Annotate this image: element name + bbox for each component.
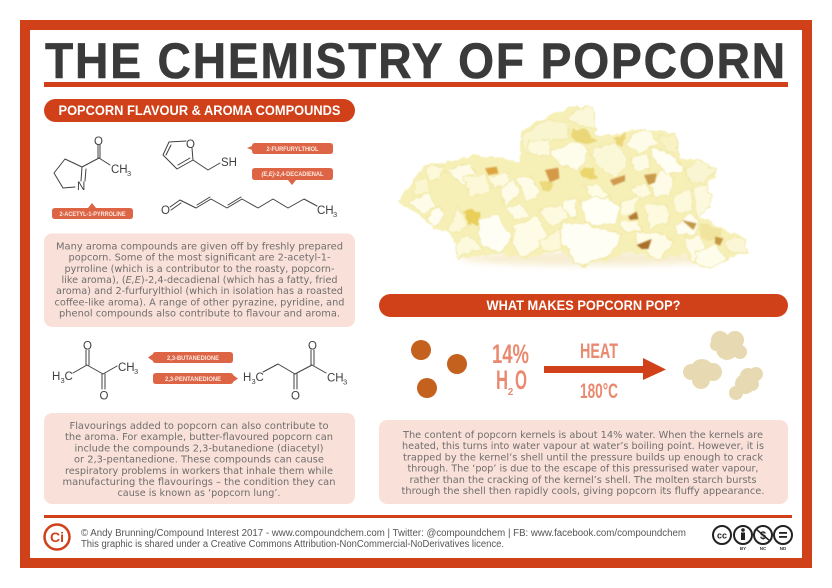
molecule: (E,E)-2,4-decadienal — [161, 197, 337, 219]
panel: flavourings text — [44, 413, 355, 504]
text: 14% H2O: O — [515, 365, 527, 395]
label: (E,E)-2,4-decadienal — [252, 168, 333, 185]
panel: aroma compounds text: pyrroline (which is a contributor to the roasty, popcorn- — [64, 264, 334, 275]
panel: aroma compounds text: coffee-like aroma). A range of other pyrazine, pyridine, and — [54, 297, 345, 308]
molecule: 2,3-pentanedione: O — [308, 340, 317, 352]
label: 2-acetyl-1-pyrroline — [52, 203, 133, 219]
molecule: 2,3-pentanedione — [243, 340, 347, 402]
molecule: 2,3-butanedione: O — [83, 340, 92, 352]
panel: aroma compounds text: aroma) and 2-furfurylthiol (which in isolation has a roasted — [56, 286, 343, 297]
icon: creative commons badges: cc — [717, 530, 727, 540]
panel: what makes popcorn pop heading — [379, 294, 788, 317]
text: 14% H2O — [492, 339, 529, 398]
panel: why popcorn pops text: heated, this turns into water vapour at water’s boiling point. However, it is — [402, 441, 764, 452]
footer credits: This graphic is shared under a Creative Commons Attribution-NonCommercial-NoDerivatives licence. — [81, 539, 504, 550]
molecule: 2,3-pentanedione: H — [243, 372, 251, 384]
label: 2,3-pentanedione — [153, 373, 238, 384]
panel: why popcorn pops text: rather than the cracking of the kernel’s shell. The molten starch bursts — [410, 475, 757, 486]
molecule: 2,3-butanedione: CH — [118, 362, 135, 374]
panel: why popcorn pops text: trapped by the kernel’s shell until the pressure builds up enough to crack — [403, 452, 764, 463]
molecule: 2,3-butanedione: H — [52, 371, 60, 383]
molecule: 2,3-butanedione: O — [100, 390, 108, 402]
icon: creative commons badges: BY — [740, 546, 746, 551]
icon: compound interest logo — [44, 524, 70, 550]
molecule: 2,3-butanedione — [52, 340, 138, 402]
molecule: 2,3-pentanedione: 3 — [252, 377, 256, 386]
panel: flavourings text: cause is known as ‘popcorn lung’. — [118, 488, 280, 499]
footer credits — [81, 528, 686, 550]
panel: aroma compounds text: like aroma), (E,E)-2,4-decadienal (which has a fatty, fried — [62, 275, 338, 286]
molecule: 2,3-butanedione: 3 — [60, 376, 65, 385]
panel: aroma compounds text — [44, 234, 355, 327]
panel: why popcorn pops text — [379, 420, 788, 504]
molecule: 2-acetyl-1-pyrroline: 3 — [127, 169, 131, 178]
molecule: 2,3-pentanedione: C — [256, 372, 264, 384]
label: 2-furfurylthiol: 2-FURFURYLTHIOL — [266, 147, 319, 153]
icon: creative commons badges: NC — [760, 546, 767, 551]
panel: flavourings text: Flavourings added to popcorn can also contribute to — [70, 421, 329, 432]
molecule: 2-furfurylthiol — [163, 139, 237, 170]
arrow — [544, 358, 666, 380]
text: 14% H2O: 14% — [492, 339, 529, 369]
label: (E,E)-2,4-decadienal: (E,E)-2,4-DECADIENAL — [262, 172, 324, 178]
molecule: (E,E)-2,4-decadienal: 3 — [333, 210, 337, 219]
molecule: 2-acetyl-1-pyrroline: N — [77, 181, 85, 193]
molecule: (E,E)-2,4-decadienal: CH — [317, 205, 334, 217]
text: 180 degrees C: 180°C — [580, 379, 618, 403]
icon: compound interest logo: Ci — [50, 529, 64, 545]
text: 14% H2O: 2 — [508, 387, 514, 398]
panel: flavourings text: the aroma. For example, butter-flavoured popcorn can — [65, 432, 333, 443]
panel: flavourings text: include the compounds 2,3-butanedione (diacetyl) — [74, 443, 324, 454]
label: 2-acetyl-1-pyrroline: 2-ACETYL-1-PYRROLINE — [60, 212, 126, 218]
label: 2,3-butanedione: 2,3-BUTANEDIONE — [167, 356, 219, 362]
molecule: 2,3-pentanedione: 3 — [343, 378, 347, 386]
molecule: 2,3-pentanedione: CH — [327, 372, 344, 384]
label: 2,3-pentanedione: 2,3-PENTANEDIONE — [165, 377, 221, 383]
panel: flavourings text: respiratory problems in workers that inhale them while — [65, 466, 333, 477]
icon: creative commons badges: ND — [780, 546, 787, 551]
image: popcorn pile — [398, 107, 747, 270]
molecule: 2-acetyl-1-pyrroline: O — [94, 136, 103, 148]
label: 2-furfurylthiol — [247, 143, 333, 154]
icon: popcorn kernels — [411, 340, 467, 398]
label: 2,3-butanedione — [148, 352, 233, 363]
panel: flavour and aroma heading — [44, 99, 355, 122]
panel: what makes popcorn pop heading: WHAT MAKES POPCORN POP? — [486, 298, 680, 313]
icon: creative commons badges: $ — [760, 530, 766, 542]
panel: why popcorn pops text: through. The ‘pop’ is due to the escape of this pressurised water vapour, — [408, 464, 759, 475]
panel: aroma compounds text: Many aroma compounds are given off by freshly prepared — [56, 242, 343, 252]
title: THE CHEMISTRY OF POPCORN — [45, 33, 787, 89]
molecule: 2,3-pentanedione: O — [291, 390, 300, 402]
molecule: 2,3-butanedione: 3 — [134, 367, 138, 376]
molecule: 2-furfurylthiol: O — [186, 139, 195, 151]
panel: flavourings text: manufacturing the flavourings – the condition they can — [62, 477, 336, 488]
panel: why popcorn pops text: The content of popcorn kernels is about 14% water. When the kernels are — [402, 430, 763, 441]
panel: aroma compounds text: phenol compounds also contribute to flavour and aroma. — [59, 308, 340, 319]
molecule: 2-acetyl-1-pyrroline: CH — [111, 164, 128, 176]
icon: popped popcorn — [683, 331, 763, 400]
text: heat: HEAT — [580, 339, 618, 363]
panel: flavour and aroma heading: POPCORN FLAVOUR & AROMA COMPOUNDS — [58, 103, 340, 118]
footer rule — [44, 515, 792, 518]
title underline — [44, 82, 788, 87]
molecule: (E,E)-2,4-decadienal: O — [161, 205, 170, 217]
icon: creative commons badges — [713, 526, 792, 551]
text: 14% H2O: H — [496, 365, 508, 395]
molecule: 2,3-butanedione: C — [64, 371, 73, 383]
panel: aroma compounds text: popcorn. Some of the most significant are 2-acetyl-1- — [68, 253, 330, 264]
molecule: 2-acetyl-1-pyrroline — [54, 136, 131, 193]
panel: why popcorn pops text: through the shell then rapidly cools, giving popcorn its fluffy appearance. — [402, 486, 764, 497]
panel: flavourings text: or 2,3-pentanedione. These compounds can cause — [74, 455, 324, 466]
footer credits: © Andy Brunning/Compound Interest 2017 - www.compoundchem.com | Twitter: @compoundchem | FB: www.facebook.com/compoundchem — [81, 528, 686, 539]
molecule: 2-furfurylthiol: SH — [221, 157, 237, 169]
